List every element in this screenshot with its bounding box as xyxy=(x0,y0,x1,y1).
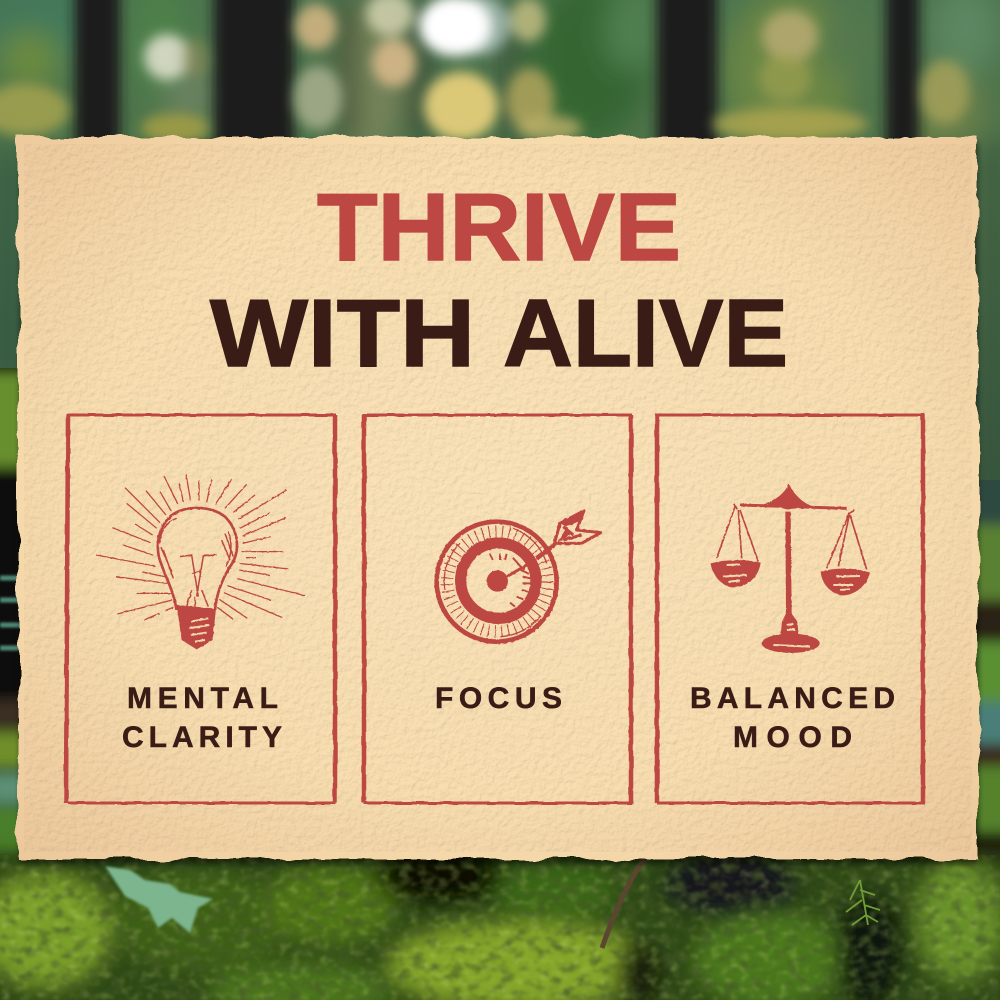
moss masses xyxy=(0,850,1000,1000)
icon: light bulb xyxy=(96,474,305,649)
title: ALIVE xyxy=(503,280,788,387)
moss foreground xyxy=(0,360,1000,1000)
icon: twig xyxy=(602,858,645,948)
label: mental clarity xyxy=(122,682,282,754)
card texture xyxy=(24,144,972,852)
card shadow xyxy=(20,142,978,864)
left strip plants xyxy=(0,368,22,859)
label: mental clarity: MENTAL xyxy=(127,682,278,715)
icon: target with arrow xyxy=(437,511,601,642)
panel: mental clarity xyxy=(66,415,336,803)
title: THRIVE xyxy=(317,174,681,281)
icon: fern leaf xyxy=(105,866,213,933)
bokeh lights xyxy=(0,0,969,143)
fern fronds at left edge xyxy=(0,578,22,648)
fern tufts xyxy=(846,880,880,925)
title xyxy=(210,174,788,387)
label: focus: FOCUS xyxy=(435,682,562,715)
panel: balanced mood xyxy=(655,415,925,803)
label: balanced mood: MOOD xyxy=(733,721,852,754)
icon: balance scales xyxy=(711,484,870,653)
card sheet xyxy=(18,137,978,859)
panel: focus xyxy=(362,415,632,803)
label: balanced mood xyxy=(690,682,895,754)
title: WITH xyxy=(210,280,475,387)
label: balanced mood: BALANCED xyxy=(690,682,895,715)
right strip plants xyxy=(976,480,1000,857)
label: mental clarity: CLARITY xyxy=(122,721,282,754)
torn paper card xyxy=(18,137,978,864)
